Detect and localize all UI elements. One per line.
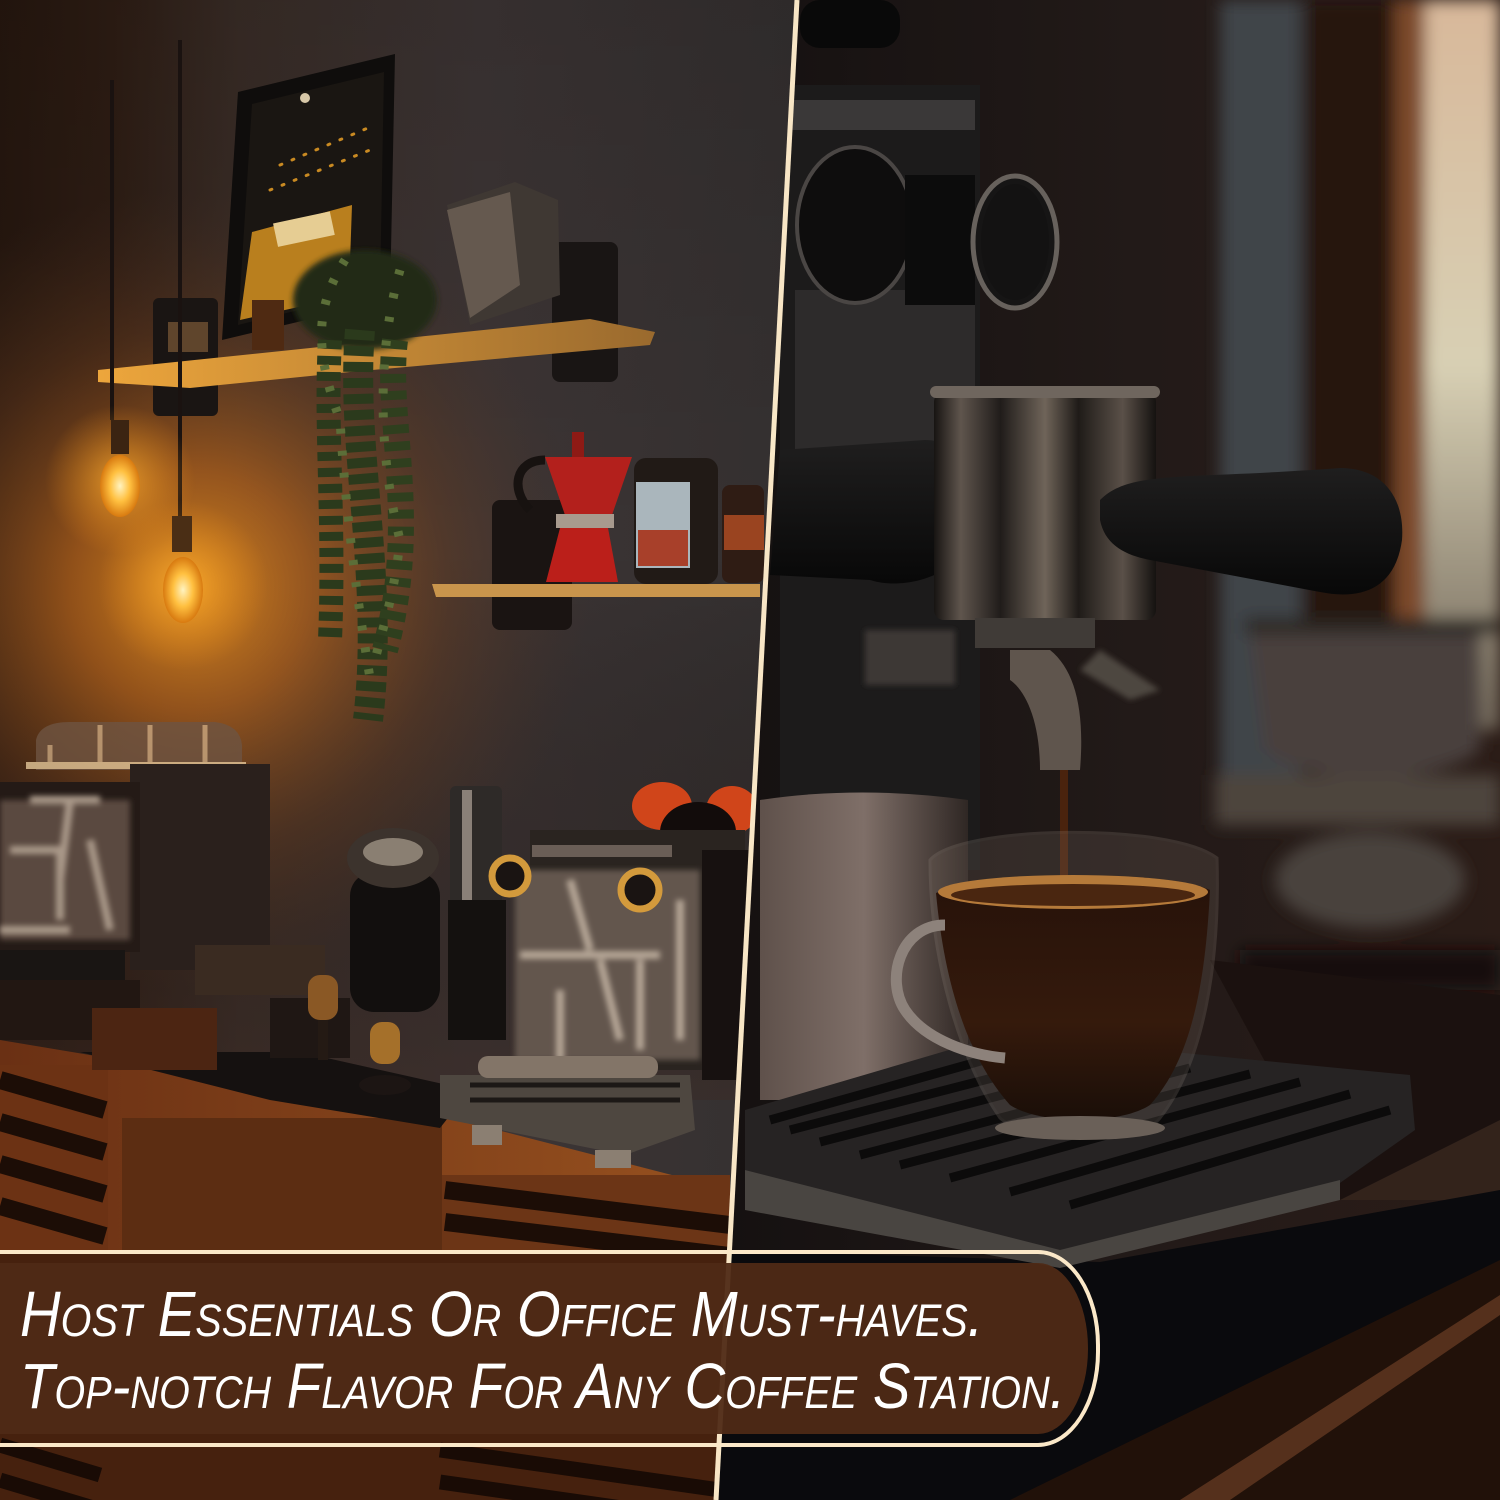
- lower shelf with moka pot and jars: [432, 432, 764, 630]
- white mug: [760, 792, 968, 1100]
- banner brown fill: [0, 1263, 1088, 1434]
- espresso stream: [1060, 770, 1068, 875]
- glass espresso cup: [896, 832, 1217, 1140]
- machine body: [780, 0, 1057, 870]
- hanging bulbs: [52, 40, 252, 654]
- blurred window background: [1215, 0, 1500, 990]
- diagonal divider line: [716, 0, 797, 1500]
- left espresso machine: [0, 764, 270, 1040]
- headline line 1: Host Essentials Or Office Must-haves.: [20, 1278, 983, 1350]
- counter: [716, 960, 1500, 1500]
- drip tray: [745, 1035, 1415, 1268]
- portafilter: [770, 386, 1402, 770]
- right espresso machine: [440, 782, 758, 1168]
- banner outer cream outline: [0, 1250, 1100, 1447]
- glasses on machine: [26, 722, 246, 770]
- hanging plant: [293, 250, 437, 720]
- tool mat and accessories: [80, 945, 470, 1128]
- banner: headline panel: [0, 1250, 1100, 1447]
- left photo: home coffee bar: [0, 0, 800, 1500]
- headline line 2: Top-notch Flavor For Any Coffee Station.: [20, 1350, 1065, 1422]
- upper shelf: [98, 182, 655, 416]
- framed poster: [222, 54, 395, 340]
- counter and sideboard: [0, 1040, 730, 1500]
- right photo: espresso pour close-up: [700, 0, 1500, 1500]
- grinder: [347, 786, 506, 1040]
